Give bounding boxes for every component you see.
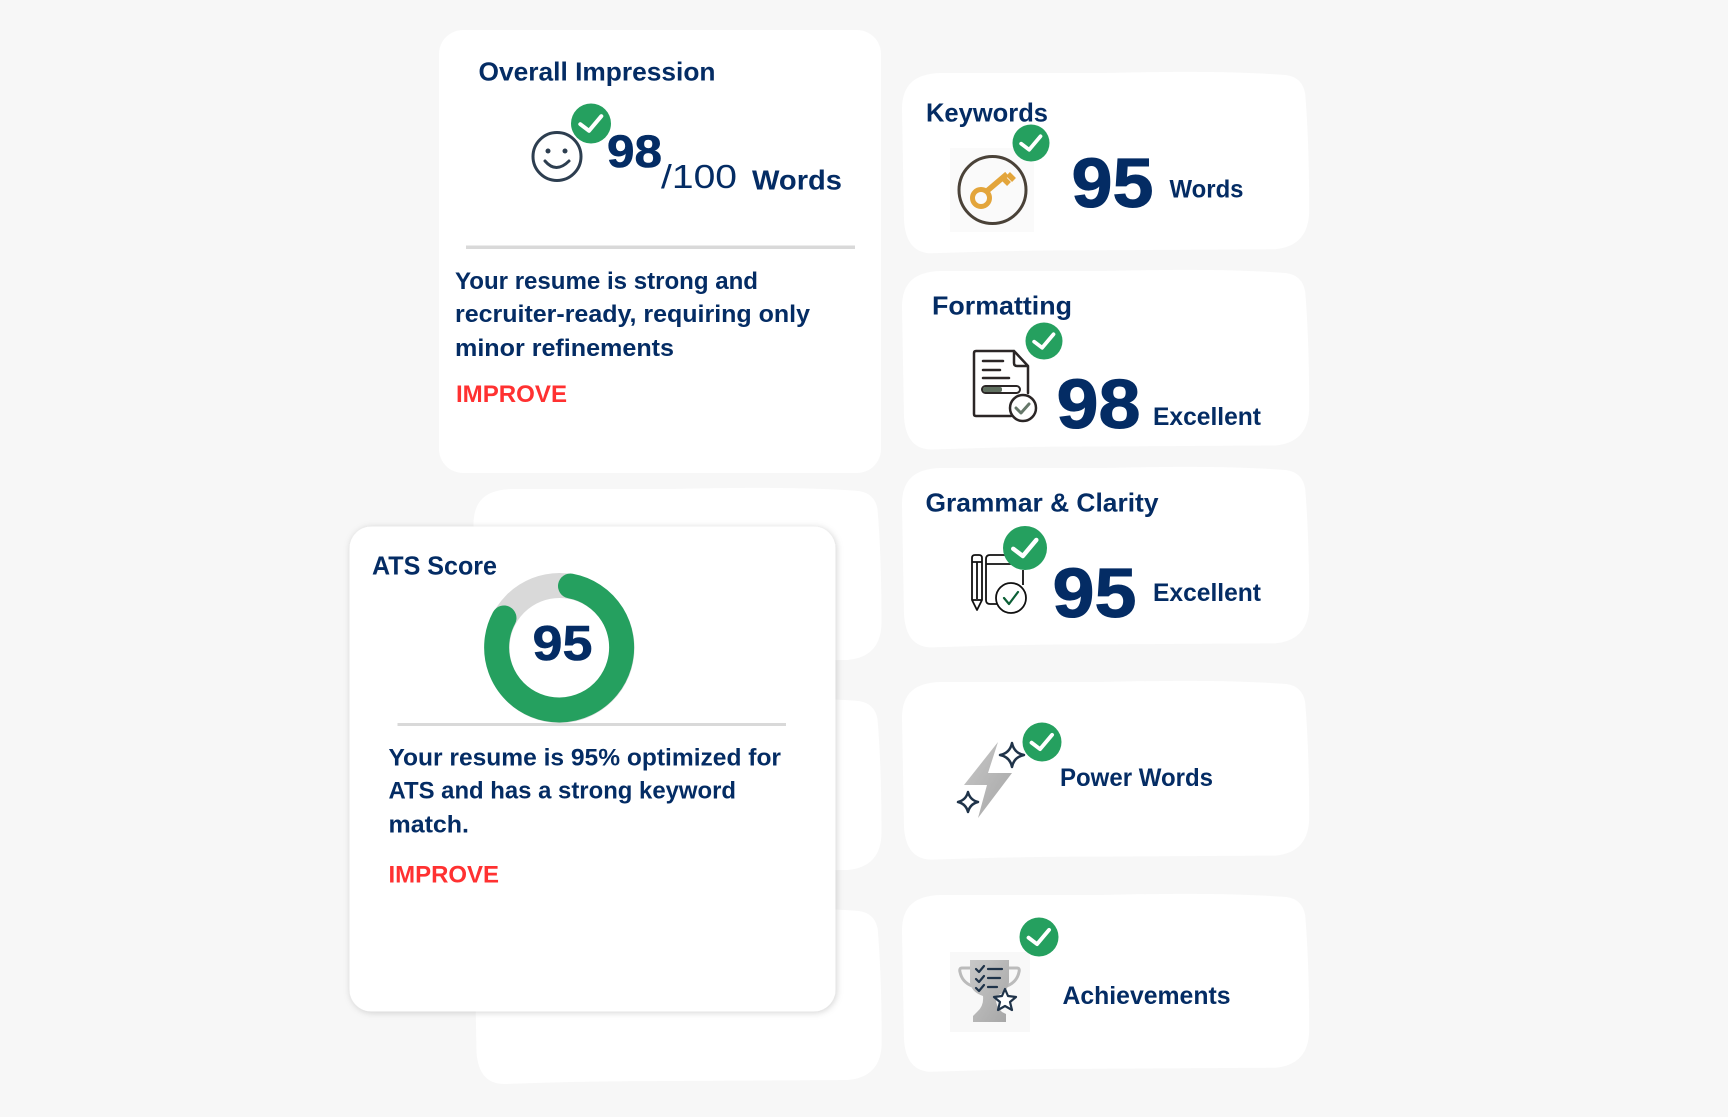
- heading: keywords: Keywords: [926, 98, 1048, 128]
- description text: Your resume is strong and: [455, 268, 758, 295]
- label: achievements: Achievements: [1062, 982, 1230, 1010]
- label: excellent: Excellent: [1153, 579, 1262, 607]
- power words card: [902, 681, 1309, 860]
- icon: check badge: [1026, 322, 1062, 360]
- score: 98: 98: [1056, 365, 1140, 443]
- overall impression card: [439, 30, 881, 473]
- achievements card: [902, 894, 1309, 1072]
- heading: ATS score: ATS Score: [372, 550, 497, 580]
- score: 98: 98: [607, 126, 662, 177]
- label: power words: Power Words: [1060, 764, 1213, 792]
- link: improve: IMPROVE: [388, 862, 499, 888]
- panel: formatting: [902, 270, 1309, 450]
- panel: keywords: [902, 72, 1309, 253]
- icon: check badge: [571, 104, 611, 144]
- panel: achievements: [902, 894, 1309, 1072]
- heading: grammar and clarity: Grammar & Clarity: [926, 488, 1159, 518]
- icon: key in circle: [950, 148, 1034, 232]
- heading: overall impression: Overall Impression: [478, 56, 716, 86]
- formatting card: [902, 270, 1309, 450]
- icon: lightning bolt with sparkles: [958, 742, 1024, 818]
- icon: pencil and notebook: [972, 555, 1026, 613]
- icon: check badge: [1020, 918, 1058, 956]
- icon: check badge: [1003, 526, 1047, 570]
- score: 95: 95: [1052, 554, 1136, 632]
- description text: Your resume is 95% optimized for: [388, 744, 781, 772]
- description text: recruiter-ready, requiring only: [455, 301, 811, 328]
- label: words: Words: [752, 164, 842, 196]
- description text: match.: [388, 812, 469, 838]
- icon: check badge: [1022, 722, 1062, 762]
- chart: ATS donut gauge: [497, 586, 622, 710]
- score suffix: /100: /100: [661, 158, 737, 195]
- description text: [455, 268, 811, 362]
- score: 95: 95: [532, 617, 592, 671]
- ATS score card: [350, 526, 836, 1012]
- heading: formatting: Formatting: [932, 290, 1072, 320]
- label: excellent: Excellent: [1153, 403, 1262, 431]
- description text: [388, 744, 781, 838]
- link: improve: IMPROVE: [456, 381, 567, 408]
- description text: ATS and has a strong keyword: [388, 778, 736, 804]
- icon: document with progress: [974, 351, 1036, 421]
- keywords card: [902, 72, 1309, 253]
- icon: smiley face: [533, 132, 581, 180]
- panel: power words: [902, 681, 1309, 860]
- panel: grammar and clarity: [902, 467, 1309, 647]
- grammar card: [902, 467, 1309, 647]
- icon: trophy with checklist and star: [950, 952, 1030, 1032]
- panel: ATS score: [350, 526, 836, 1012]
- description text: minor refinements: [455, 335, 674, 362]
- panel: background stacked cards: [474, 488, 882, 1084]
- score: 95: 95: [1072, 144, 1154, 222]
- panel: overall impression: [439, 30, 881, 473]
- label: words: Words: [1170, 176, 1244, 204]
- icon: check badge: [1012, 124, 1050, 162]
